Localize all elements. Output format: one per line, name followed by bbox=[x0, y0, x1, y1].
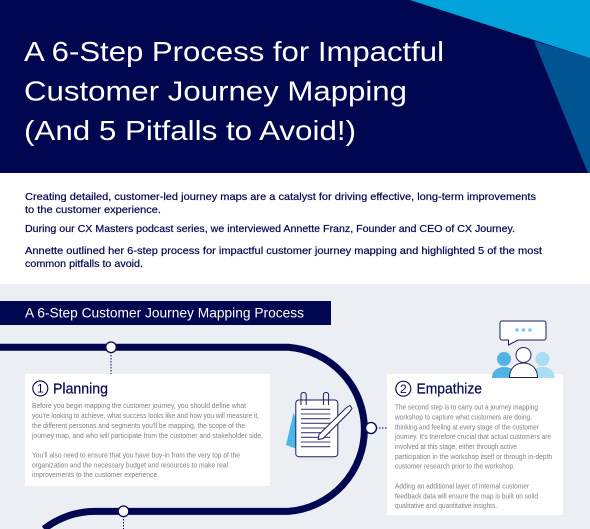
header band bbox=[0, 0, 590, 173]
intro text: During our CX Masters podcast series, we interviewed Annette Franz, Founder and CEO of CX Journey. bbox=[25, 224, 515, 235]
step 2 number: 2 bbox=[400, 382, 407, 396]
path node: step 1 bbox=[106, 342, 116, 353]
step 1 body text: organization and the necessary budget and resources to make real bbox=[32, 460, 228, 469]
step 1 body text: the different personas and segments you'll be mapping, the scope of the bbox=[32, 421, 245, 430]
step 1 body text: journey map, and who will participate from the customer and stakeholder side. bbox=[31, 431, 263, 440]
step 2 body text: thinking and feeling at every stage of the customer bbox=[395, 422, 540, 431]
section heading banner bbox=[0, 301, 331, 325]
step 2 body text: feedback data will ensure the map is built on solid bbox=[395, 491, 538, 500]
icon: speech bubble bbox=[500, 321, 546, 345]
intro text: Annette outlined her 6-step process for impactful customer journey mapping and highlighted 5 of the most bbox=[25, 246, 542, 257]
step 1 heading: Planning bbox=[53, 381, 108, 397]
step 2 body text: The second step is to carry out a journey mapping bbox=[395, 402, 538, 412]
step 2 body text: journey. It's therefore crucial that actual customers are bbox=[394, 432, 551, 441]
path node: step 3 bbox=[118, 506, 129, 517]
step 2 body text: participation in the workshop itself or through in-depth bbox=[395, 452, 552, 461]
title: A 6-Step Process for Impactful bbox=[24, 36, 444, 67]
title bbox=[24, 36, 444, 146]
panel: step 1 planning bbox=[25, 374, 270, 486]
intro text bbox=[25, 192, 542, 270]
connector: step 2 bbox=[376, 427, 387, 429]
step 1 body text: Before you begin mapping the customer journey, you should define what bbox=[32, 401, 246, 410]
step 2 number bbox=[396, 381, 411, 396]
intro text: Creating detailed, customer-led journey maps are a catalyst for driving effective, long-term improvements bbox=[25, 192, 536, 203]
step 2 body text: workshop to capture what customers are doing, bbox=[394, 412, 532, 421]
title: Customer Journey Mapping bbox=[24, 76, 407, 106]
section heading banner: A 6-Step Customer Journey Mapping Process bbox=[25, 306, 304, 320]
step 1 body text: You'll also need to ensure that you have buy-in from the very top of the bbox=[32, 450, 240, 459]
step 1 body text: improvements to the customer experience. bbox=[32, 470, 159, 479]
step 2 body text: qualitative and quantitative insights. bbox=[395, 501, 497, 510]
step 2 body text: involved at this stage, either through active bbox=[395, 442, 517, 451]
step 1 number bbox=[33, 381, 48, 396]
step 1 body text: you're looking to achieve, what success looks like and how you will measure it, bbox=[32, 411, 259, 420]
step 1 number: 1 bbox=[37, 382, 44, 396]
panel: step 2 empathize bbox=[387, 374, 563, 515]
path node: step 2 bbox=[366, 422, 376, 434]
icon: group of people bbox=[492, 348, 554, 378]
intro text: common pitfalls to avoid. bbox=[25, 259, 143, 270]
process section background bbox=[0, 284, 590, 529]
journey path bbox=[0, 347, 364, 529]
intro text: to the customer experience. bbox=[25, 205, 161, 216]
step 2 heading: Empathize bbox=[416, 381, 482, 397]
step 2 body text: Adding an additional layer of internal customer bbox=[395, 481, 529, 490]
connector: step 3 bbox=[122, 516, 124, 529]
title: (And 5 Pitfalls to Avoid!) bbox=[24, 115, 356, 146]
connector: step 1 bbox=[110, 352, 112, 374]
icon: notepad and pen bbox=[286, 392, 352, 457]
step 2 body text: customer research prior to the workshop. bbox=[395, 462, 515, 471]
step 1 body text bbox=[31, 401, 263, 479]
step 2 body text bbox=[394, 402, 552, 510]
